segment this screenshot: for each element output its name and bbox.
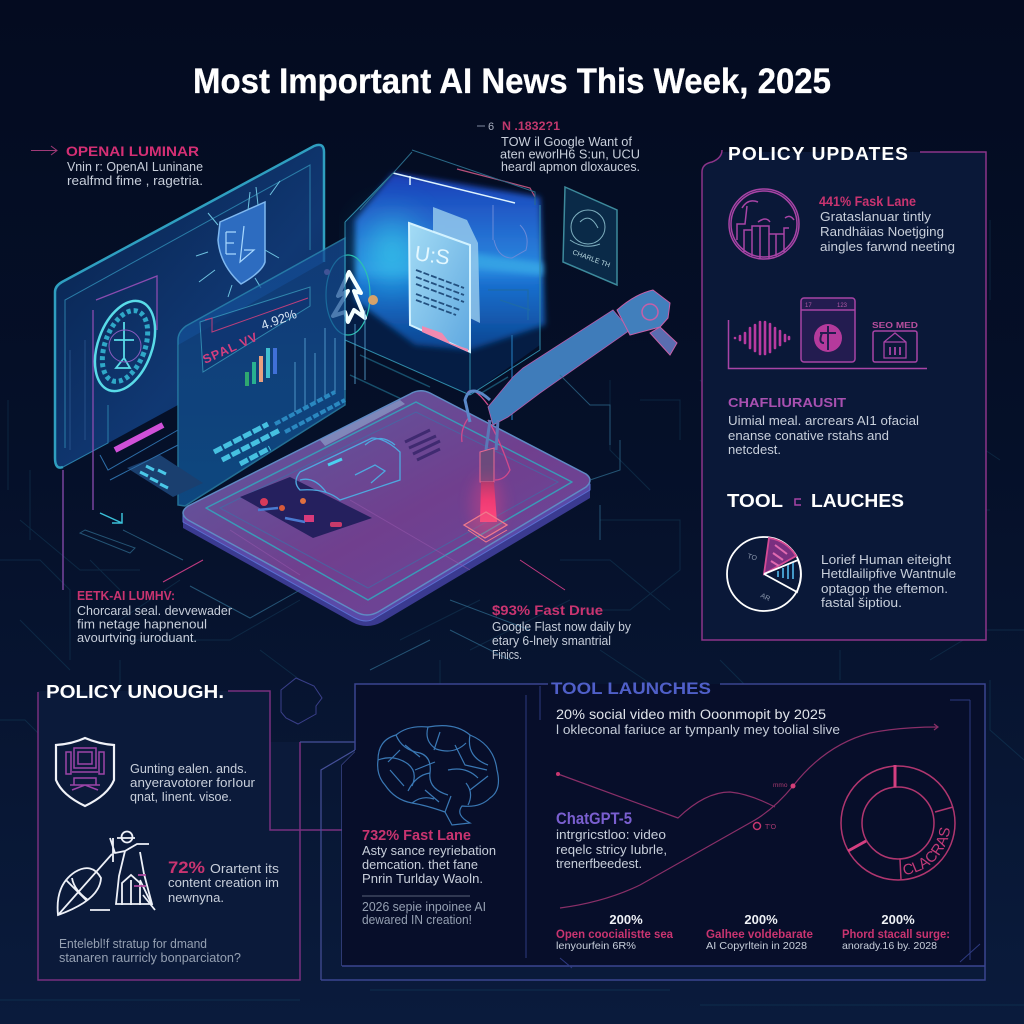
- text: fast lane: 2026 sepie inpoinee AI: [362, 900, 486, 914]
- text: fast lane: [362, 828, 496, 927]
- text: chafliurausit: CHAFLIURAUSIT: [728, 395, 846, 410]
- chart: screen stat panel: [178, 238, 365, 506]
- callout: Eetk-AI Lumhv: fim netage hapnenoul: [77, 616, 207, 632]
- icon: window: [801, 298, 855, 362]
- stripes: [405, 430, 440, 460]
- stats row: Galhee voldebarate: [706, 929, 813, 941]
- text: lorief human: Hetdlailipfive Wantnule: [821, 566, 956, 581]
- callout: Google top: heardl apmon dloxauces.: [501, 159, 640, 174]
- text: fast lane: Pnrin Turlday Waoln.: [362, 871, 483, 886]
- pie chart: [727, 537, 801, 611]
- callout: Fast Drive: [492, 603, 631, 662]
- text: fask lane: aingles farwnd neeting: [820, 239, 955, 254]
- text: lorief human: optagop the eftemon.: [821, 581, 948, 596]
- stats row: lenyourfein 6R%: [556, 940, 636, 952]
- callout: Eetk-AI Lumhv: EETK-AI LUMHV:: [77, 589, 175, 603]
- icon: top right hologram card: CHARLE TH: [571, 249, 611, 269]
- callout: Eetk-AI Lumhv: avourtving iuroduant.: [77, 630, 197, 645]
- icon: top right hologram card: [563, 187, 617, 285]
- text: gunting salen: qnat, Iinent. visoe.: [130, 789, 232, 804]
- text: social video: [556, 707, 840, 737]
- callout: Google top: TOW il Google Want of: [501, 134, 632, 149]
- panel: glowing data cube: [345, 150, 545, 420]
- text: gunting salen: Gunting ealen. ands.: [130, 761, 247, 776]
- text: 72 percent: 72%: [168, 858, 205, 877]
- text: fask lane: Grataslanuar tintly: [820, 209, 932, 224]
- robot arm: [462, 290, 677, 480]
- text: chatgpt-5: reqelc stricy Iubrle,: [556, 842, 667, 857]
- callout: Fast Drive: etary 6-lnely smantrial: [492, 633, 611, 648]
- title: Most Important AI News This Week, 2025: [193, 62, 831, 101]
- icon: city circle: [729, 189, 799, 259]
- icon: seo med: [872, 320, 918, 362]
- text: fast lane: dewared IN creation!: [362, 913, 472, 927]
- callout: Fast Drive: Finics.: [492, 647, 522, 662]
- chart: donut: CLACRAS: [903, 828, 950, 874]
- stats row: AI Copyrltein in 2028: [706, 940, 807, 952]
- callout: OpenAI Luminar: OPENAI LUMINAR: [66, 143, 199, 159]
- stats row: anorady.16 by. 2028: [842, 940, 937, 952]
- callout: Eetk-AI Lumhv: Chorcaral seal. devvewader: [77, 603, 233, 618]
- central isometric illustration: [55, 145, 677, 670]
- panel: left holographic screen: [55, 145, 324, 590]
- text: lorief human: Lorief Human eiteight: [821, 552, 951, 567]
- text: fask lane: [819, 194, 955, 254]
- text: entelebl: Entelebl!f stratup for dmand: [59, 937, 207, 951]
- dark screen: [240, 477, 372, 538]
- text: gunting salen: anyeravotorer forIour: [130, 775, 256, 790]
- heading: tool launches: [727, 491, 904, 511]
- callout: OpenAI Luminar: realfmd fime , ragetria.: [67, 173, 203, 188]
- connector lines: [80, 375, 620, 670]
- text: chatgpt-5: trenerfbeedest.: [556, 856, 642, 871]
- callout: Google top: 6: [488, 121, 494, 133]
- chart: screen stat panel: SPAL VV: [201, 330, 260, 367]
- chart: waveform and icons: [728, 298, 927, 368]
- stats row: [556, 912, 950, 952]
- callout: Google top: aten eworlH6 S:un, UCU: [500, 146, 640, 162]
- chart: line curves: mmo: [773, 782, 788, 789]
- text: fask lane: Randhäias Noetjging: [820, 224, 944, 239]
- panel: tool launches: [321, 679, 986, 981]
- text: 72 percent: content creation im: [168, 875, 279, 890]
- heading: tool launches: TOOL LAUNCHES: [551, 679, 711, 698]
- text: chatgpt-5: ChatGPT-5: [556, 809, 632, 828]
- icon: brain: [378, 726, 498, 825]
- icon: document cards: U:S: [413, 242, 451, 270]
- text: 72 percent: newnyna.: [168, 890, 224, 905]
- chart: line curves: [556, 724, 938, 908]
- icon: A logo: [324, 255, 378, 335]
- heading: policy unough: POLICY UNOUGH.: [46, 682, 224, 702]
- text: fast lane: demcation. thet fane: [362, 857, 478, 872]
- circuit pattern background: [0, 220, 1024, 1005]
- text: gunting salen: [130, 761, 256, 804]
- chart: donut: [840, 765, 956, 881]
- text: chafliurausit: [728, 395, 919, 457]
- text: chatgpt-5: [556, 809, 667, 871]
- callout: Eetk-AI Lumhv: [77, 589, 233, 645]
- text: social video: 20% social video mith Ooonmopit by 2025: [556, 707, 826, 722]
- heading: tool launches: LAUCHES: [811, 491, 904, 511]
- stats row: Phord stacall surge:: [842, 929, 950, 941]
- text: entelebl: stanaren raurricly bonparciaton?: [59, 951, 241, 965]
- device outline: [296, 438, 400, 500]
- text: chafliurausit: enanse conative rstahs and: [728, 428, 889, 443]
- callout: Google top: N .1832?1: [502, 121, 561, 133]
- platform underside layers: [183, 404, 590, 626]
- icon: robot shield: [56, 738, 114, 806]
- text: 72 percent: [168, 858, 280, 905]
- text: lorief human: fastal šiptiou.: [821, 595, 902, 610]
- panel: policy unough: [38, 678, 355, 980]
- text: fast lane: 732% Fast Lane: [362, 828, 471, 844]
- icon: window: 17: [805, 303, 812, 309]
- text: chatgpt-5: intrgricstloo: video: [556, 827, 666, 842]
- stats row: 200%: [744, 912, 778, 927]
- text: fask lane: 441% Fask Lane: [819, 194, 916, 209]
- stats row: 200%: [609, 912, 643, 927]
- icon: circular badge: [84, 293, 166, 399]
- heading: tool launches: TOOL: [727, 491, 783, 511]
- platform top: [183, 391, 590, 615]
- callout: OpenAI Luminar: [31, 143, 203, 188]
- text: 72 percent: Orartent its: [210, 861, 280, 876]
- callout: Fast Drive: $93% Fast Drue: [492, 603, 604, 618]
- heading: policy updates: POLICY UPDATES: [728, 144, 909, 164]
- callout: OpenAI Luminar: Vnin r: OpenAI Luninane: [67, 159, 203, 174]
- text: chafliurausit: Uimial meal. arcrears AI1 ofacial: [728, 413, 919, 428]
- text: entelebl: [59, 937, 241, 965]
- stats row: Open coocialistte sea: [556, 929, 674, 941]
- callout: Google top: [477, 121, 640, 174]
- chart: line curves: T'O: [765, 824, 777, 831]
- keyboard keys: [100, 392, 345, 497]
- stats row: 200%: [881, 912, 915, 927]
- callout: Fast Drive: Google Flast now daily by: [492, 619, 631, 634]
- pie chart: AR: [759, 592, 771, 603]
- icon: person with leaf: [58, 832, 155, 915]
- pie chart: TO: [746, 553, 758, 563]
- base platform: [183, 391, 590, 626]
- panel: policy updates: [702, 144, 986, 640]
- chart: screen stat panel: 4.92%: [259, 306, 299, 333]
- beacon on platform: [464, 448, 507, 542]
- text: chafliurausit: netcdest.: [728, 442, 781, 457]
- text: fast lane: Asty sance reyriebation: [362, 843, 496, 858]
- icon: shield: [196, 181, 280, 297]
- icon: window: 123: [837, 303, 848, 309]
- icon: seo med: SEO MED: [872, 320, 918, 330]
- text: lorief human: [821, 552, 956, 610]
- text: social video: l okleconal fariuce ar tympanly mey toolial slive: [556, 722, 840, 737]
- icon: document cards: [409, 207, 480, 352]
